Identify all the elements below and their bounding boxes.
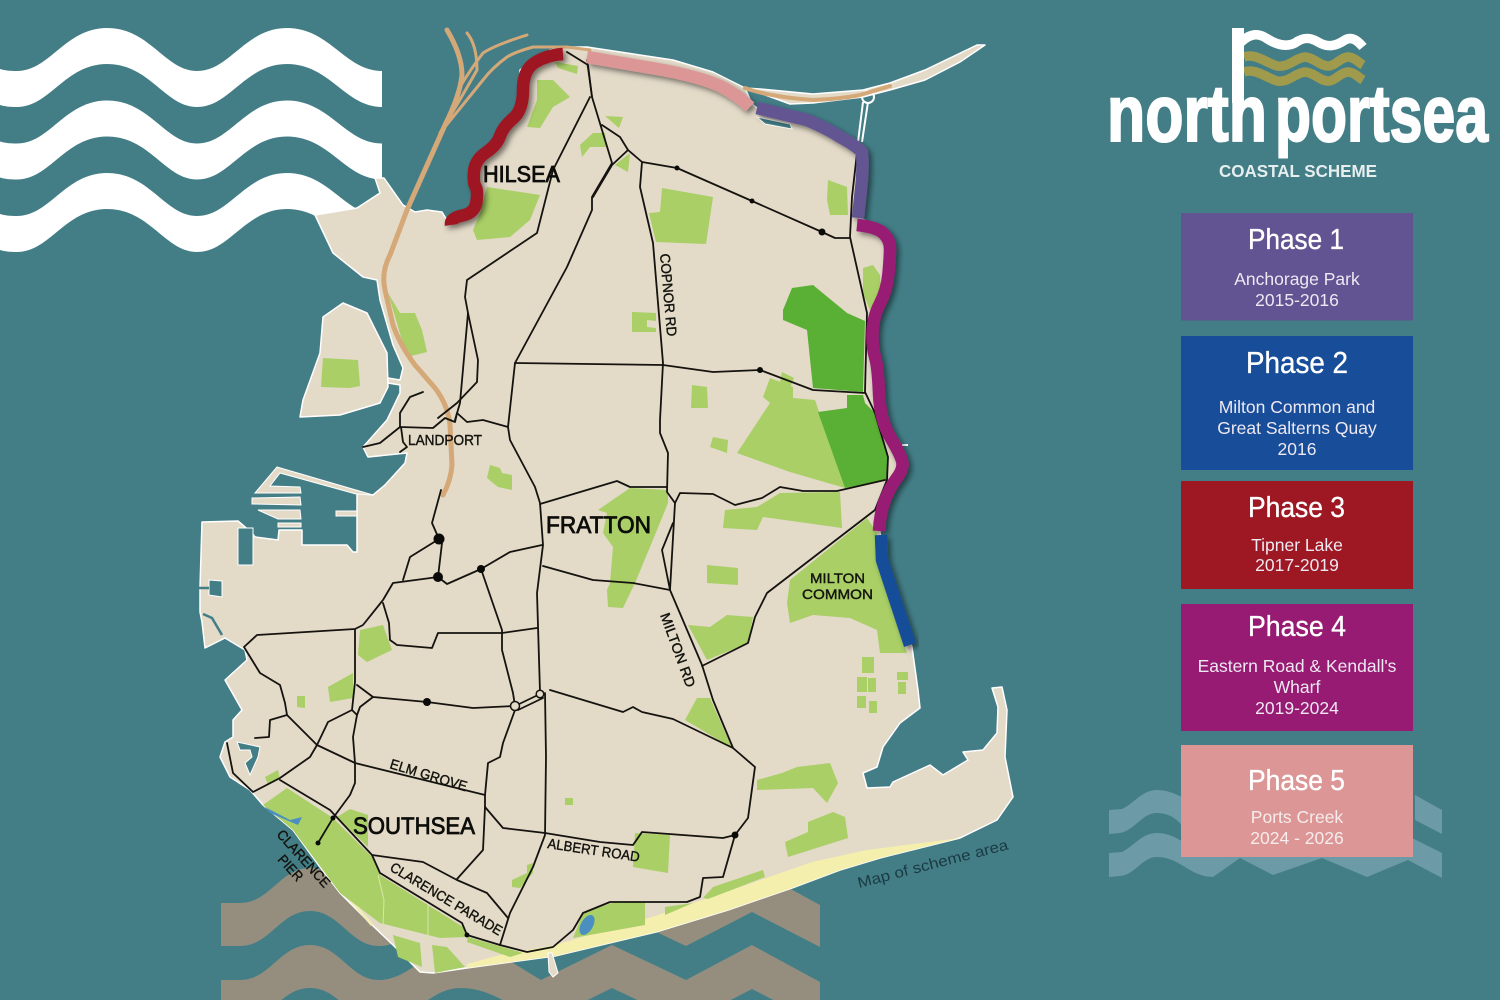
logo waves, gold (1244, 56, 1363, 81)
panel: Phase 5: Phase 5 (1248, 765, 1345, 797)
panel: Phase 4: Wharf (1274, 677, 1320, 697)
logo h ascender (1232, 28, 1244, 103)
phase 3 route: Tipner Lake (451, 54, 563, 225)
panel: Phase 1: 2015-2016 (1255, 290, 1339, 310)
panel: Phase 1: Phase 1 (1248, 224, 1344, 256)
map label: LANDPORT: LANDPORT (408, 433, 482, 449)
panel: Phase 4 (1181, 604, 1413, 731)
map label: Albert Road: ALBERT ROAD (547, 835, 641, 865)
map label: Pier: PIER (275, 851, 307, 884)
panel: Phase 4: 2019-2024 (1255, 698, 1339, 718)
panel: Phase 1: Anchorage Park (1234, 269, 1360, 289)
south pier (548, 953, 558, 977)
road junction dots (316, 166, 826, 938)
panel: Phase 4: Phase 4 (1248, 611, 1346, 643)
map label: HILSEA: HILSEA (483, 161, 561, 187)
panel: Phase 5: Ports Creek (1251, 807, 1343, 827)
land: main island (200, 47, 1013, 973)
caption: Map of scheme area: Map of scheme area (856, 836, 1011, 892)
land: dockyard piers (252, 467, 373, 527)
A27 road (384, 30, 890, 495)
panel: Phase 3 (1181, 481, 1413, 589)
logo: North Portsea Coastal Scheme (1107, 28, 1488, 181)
panel: Phase 4: Eastern Road & Kendall's (1198, 656, 1397, 676)
logo subtitle: COASTAL SCHEME (1219, 161, 1377, 181)
pale waves behind phase 5 (1109, 790, 1442, 878)
logo wave, white (1240, 35, 1363, 47)
docks and inlets (209, 117, 792, 775)
roundabout rings (510, 690, 544, 710)
map label: Clarence: CLARENCE (274, 826, 334, 891)
phase 5 route: Ports Creek (587, 57, 750, 107)
panel: Phase 2: Milton Common and (1219, 397, 1375, 417)
panel: Phase 2: Great Salterns Quay (1217, 418, 1377, 438)
map label: Clarence Parade: CLARENCE PARADE (387, 859, 505, 938)
map label: Milton Rd: MILTON RD (657, 611, 699, 689)
map of Portsea Island (199, 30, 1013, 977)
panel: Phase 3: Tipner Lake (1251, 535, 1343, 555)
beach sliver, Southsea (296, 832, 372, 925)
dockyard slits (199, 588, 222, 635)
light green parks (263, 62, 912, 973)
dark green parks (783, 285, 888, 488)
panel: Phase 2: Phase 2 (1246, 345, 1348, 380)
phase 2 route: Milton Common (881, 535, 910, 645)
beach (467, 838, 960, 968)
map label: FRATTON: FRATTON (546, 512, 651, 539)
map label: Milton: MILTON (810, 570, 865, 586)
panel: Phase 1 (1181, 213, 1413, 320)
map label: Common: COMMON (802, 586, 873, 602)
phase 4 route: Eastern Road and Kendall's Wharf (857, 225, 903, 531)
land: Whale Island (300, 303, 388, 417)
panel: Phase 5 (1181, 745, 1413, 857)
map label: SOUTHSEA: SOUTHSEA (353, 813, 475, 840)
panel: Phase 3: Phase 3 (1248, 492, 1345, 524)
roads (227, 52, 888, 952)
panel: Phase 3: 2017-2019 (1255, 555, 1339, 575)
tan waves, bottom (221, 868, 820, 1000)
common footpaths (378, 875, 428, 940)
white waves, top left (0, 28, 382, 252)
logo word: north: north (1107, 69, 1267, 158)
roundabout and bridge (858, 91, 908, 445)
panel: Phase 2 (1181, 336, 1413, 470)
land strip, north shore (745, 45, 985, 104)
map label: Copnor Rd: COPNOR RD (657, 253, 680, 337)
lakes (265, 807, 598, 938)
panel: Phase 2: 2016 (1278, 439, 1316, 459)
phase 1 route: Anchorage Park (757, 108, 862, 218)
map label: Elm Grove: ELM GROVE (388, 756, 469, 794)
panel: Phase 5: 2024 - 2026 (1250, 828, 1344, 848)
